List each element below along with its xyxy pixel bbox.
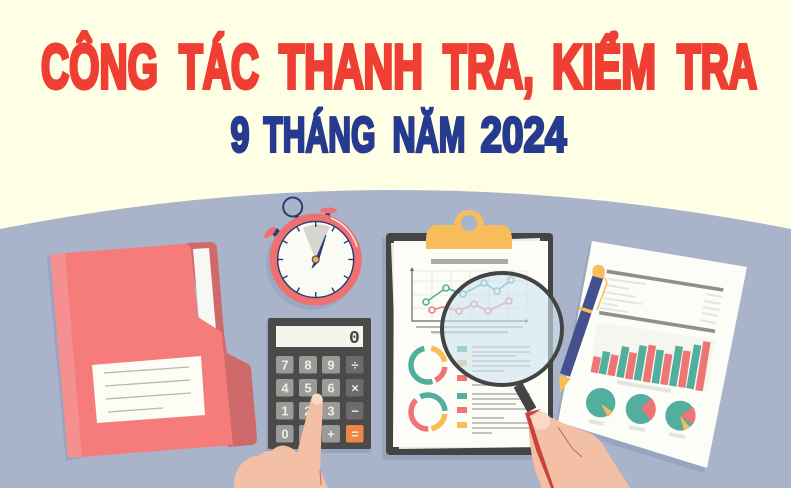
calculator keys: 4 <box>281 380 289 396</box>
red series <box>432 301 509 311</box>
hand holding magnifier <box>525 409 630 488</box>
calculator keys: . <box>306 426 310 442</box>
calculator <box>266 318 371 453</box>
title: KIỂM <box>552 31 656 102</box>
subtitle: 9 <box>230 108 250 162</box>
calculator keys: 8 <box>304 358 312 372</box>
calculator keys: 5 <box>304 380 312 396</box>
calculator keys: = <box>351 426 359 442</box>
calculator keys <box>276 356 364 442</box>
title <box>41 31 757 102</box>
title: TÁC <box>179 32 259 102</box>
stopwatch ring <box>283 198 302 216</box>
line chart <box>410 259 529 334</box>
stopwatch needle <box>312 235 326 268</box>
calculator keys: 3 <box>327 404 335 418</box>
calculator keys: 0 <box>281 426 289 442</box>
calculator keys: 7 <box>281 358 289 372</box>
donut chart top <box>411 348 445 382</box>
subtitle: THÁNG <box>264 106 376 162</box>
folder label <box>92 356 205 423</box>
desk background <box>0 190 791 488</box>
sheet of paper with bar chart <box>555 241 747 473</box>
bar chart <box>594 342 707 391</box>
calculator keys: × <box>351 380 359 396</box>
sheet header lines <box>599 271 723 331</box>
calculator keys: 2 <box>304 404 312 418</box>
calculator display: 0 <box>349 329 360 349</box>
subtitle: 2024 <box>480 108 567 162</box>
pen <box>559 265 607 393</box>
calculator keys: + <box>327 426 335 442</box>
lens <box>442 273 562 385</box>
folder <box>47 242 257 461</box>
magnifier grip <box>525 409 554 488</box>
calculator keys: 6 <box>327 380 335 396</box>
calculator keys: 9 <box>327 358 335 372</box>
pie chart 3 <box>665 401 696 437</box>
pie chart 1 <box>586 388 615 424</box>
subtitle: NĂM <box>392 106 466 162</box>
folder paper <box>193 248 216 330</box>
calculator keys: 1 <box>281 404 289 418</box>
handle <box>518 385 532 410</box>
hand pressing calculator <box>234 394 328 488</box>
sheet chart backdrop <box>590 322 715 391</box>
clipboard clip <box>426 210 512 249</box>
title: THANH <box>279 32 423 102</box>
legend and text lines <box>457 346 530 433</box>
magnifying glass <box>442 273 562 410</box>
stopwatch <box>262 198 362 310</box>
subtitle <box>230 106 567 162</box>
calculator keys: ÷ <box>351 358 359 372</box>
clipboard paper <box>391 238 548 449</box>
calculator keys: − <box>351 404 359 418</box>
pie chart 2 <box>626 394 656 430</box>
clipboard <box>382 210 553 460</box>
thumb nail <box>532 412 550 430</box>
stopwatch buttons <box>262 208 337 240</box>
elapsed time wedge <box>303 224 330 258</box>
title: TRA, <box>443 32 534 102</box>
donut chart bottom <box>411 395 445 429</box>
title: CÔNG <box>41 31 158 102</box>
green series <box>426 280 511 302</box>
